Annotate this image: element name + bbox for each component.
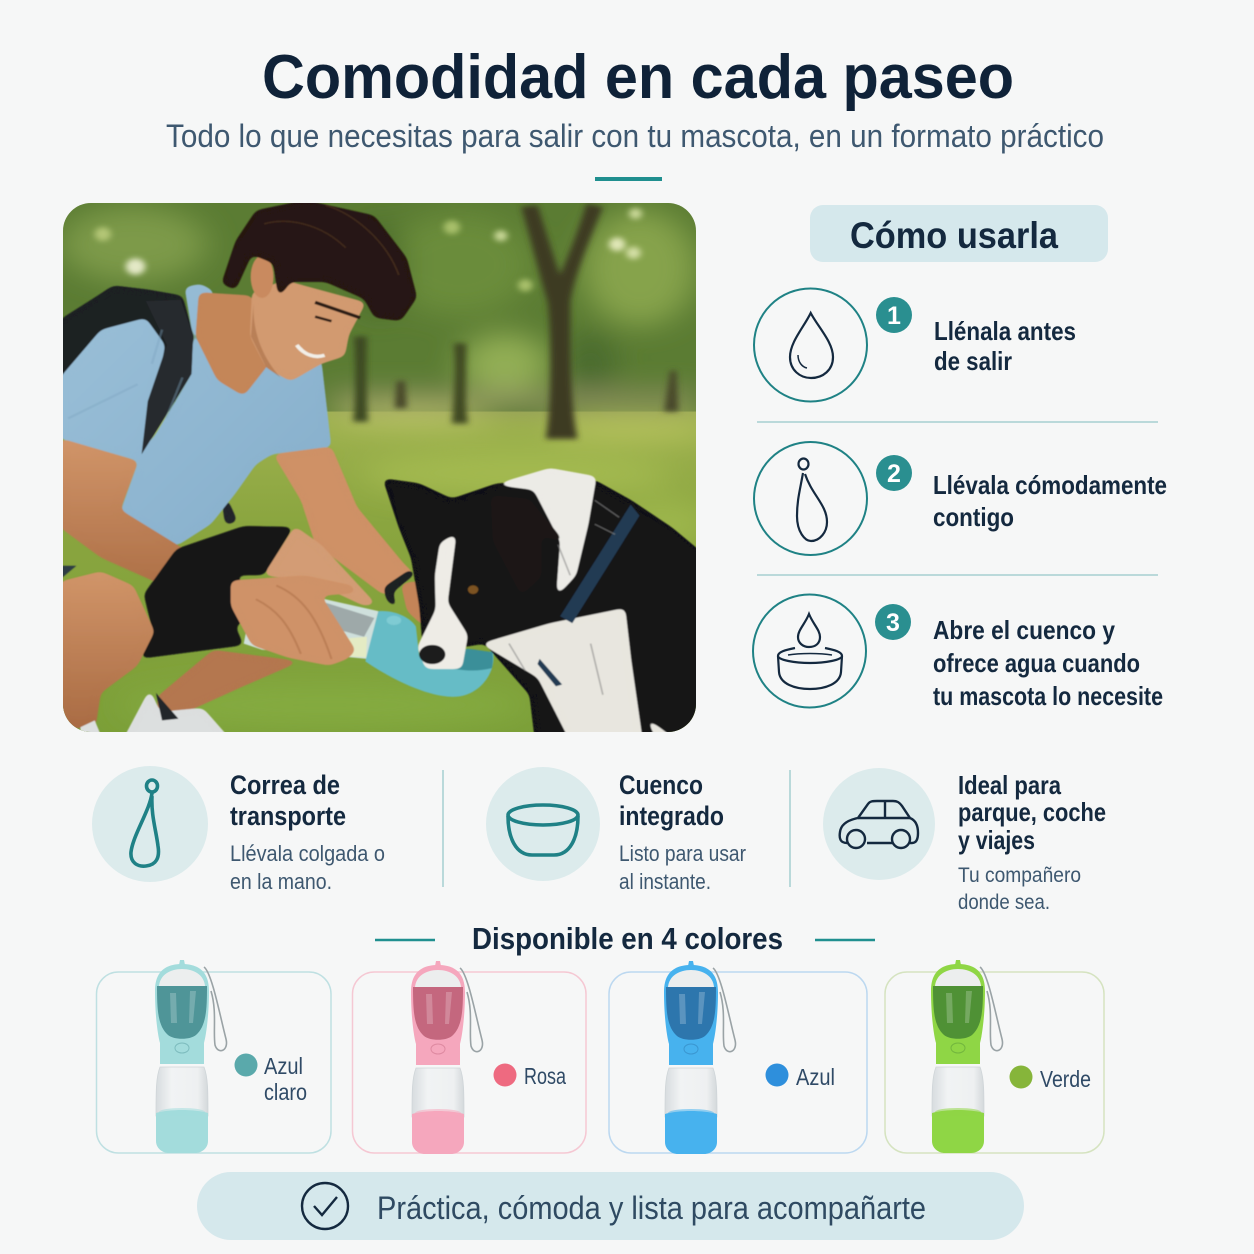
- photo background: [60, 200, 713, 735]
- step 2 text: [933, 470, 1167, 532]
- colour card: green: Verde: [1040, 1066, 1091, 1092]
- dog: [382, 468, 709, 746]
- shorts: [140, 526, 293, 659]
- subtitle: Todo lo que necesitas para salir con tu mascota, en un formato práctico: [166, 118, 1104, 154]
- feature text: en la mano.: [230, 869, 332, 894]
- badge 3: 3: [886, 609, 900, 637]
- face details: [297, 302, 360, 357]
- icon: check: [302, 1183, 348, 1229]
- feature text: y viajes: [958, 825, 1035, 855]
- backpack: [63, 285, 194, 439]
- shirt: [60, 284, 331, 546]
- feature text: Correa de: [230, 770, 340, 800]
- colour card: blue: [609, 961, 867, 1154]
- shoe: [126, 694, 226, 732]
- badge 2: [876, 455, 912, 491]
- feature text: Ideal para: [958, 770, 1061, 800]
- hand: [231, 575, 356, 666]
- badge 2: 2: [887, 460, 901, 488]
- step 1: [754, 288, 1076, 402]
- step 3: [753, 594, 1163, 711]
- feature text: Tu compañero: [958, 864, 1081, 887]
- watch: [384, 570, 414, 605]
- title: Comodidad en cada paseo: [262, 43, 1014, 112]
- feature: bowl: [486, 767, 746, 894]
- heading: colours: Disponible en 4 colores: [472, 921, 783, 956]
- icon: strap: [754, 442, 867, 555]
- feature text: transporte: [230, 801, 346, 831]
- step 3 text: tu mascota lo necesite: [933, 681, 1163, 711]
- colour card: light blue: claro: [264, 1079, 307, 1105]
- colour card: pink: [352, 961, 586, 1154]
- feature text: [230, 770, 385, 894]
- step 3 text: Abre el cuenco y: [933, 615, 1115, 645]
- colour card: light blue: [96, 960, 331, 1153]
- head: [250, 280, 366, 382]
- skin: neck, arms, legs: [196, 292, 269, 396]
- icon: water drop: [754, 288, 867, 402]
- photo: man giving water to dog in park: [60, 200, 713, 746]
- step 2 text: contigo: [933, 502, 1014, 532]
- badge 1: [876, 297, 912, 333]
- step 2: [754, 442, 1167, 555]
- feature text: parque, coche: [958, 797, 1106, 827]
- feature text: [958, 770, 1106, 914]
- step 1 text: Llénala antes: [934, 316, 1076, 346]
- colour card: green: [885, 960, 1104, 1153]
- bottle green: [931, 960, 1003, 1153]
- bottom banner: [197, 1172, 1024, 1240]
- badge 3: [875, 604, 911, 640]
- product bottle: [244, 596, 493, 697]
- step 3 text: ofrece agua cuando: [933, 648, 1140, 678]
- bottom banner: Práctica, cómoda y lista para acompañarte: [377, 1190, 926, 1226]
- feature: car: [823, 768, 1106, 914]
- feature text: integrado: [619, 801, 724, 831]
- colour card: pink: Rosa: [524, 1063, 566, 1089]
- feature: strap: [92, 766, 385, 894]
- colour card: blue: Azul: [796, 1064, 835, 1090]
- feature text: Cuenco: [619, 770, 703, 800]
- feature text: Listo para usar: [619, 841, 746, 866]
- heading: Cómo usarla: [810, 205, 1108, 262]
- icon: car: [840, 801, 918, 848]
- icon: strap: [131, 780, 158, 866]
- step 3 text: [933, 615, 1163, 711]
- step 1 text: de salir: [934, 346, 1012, 376]
- bottle pink: [411, 961, 483, 1154]
- feature text: [619, 770, 746, 894]
- badge 1: 1: [887, 302, 901, 330]
- icon: bowl: [508, 805, 578, 855]
- feature text: donde sea.: [958, 891, 1050, 914]
- step 1 text: [934, 316, 1076, 376]
- feature text: al instante.: [619, 869, 711, 894]
- heading: Cómo usarla: Cómo usarla: [850, 215, 1058, 256]
- feature text: Llévala colgada o: [230, 841, 385, 866]
- icon: bowl with drop: [753, 594, 866, 708]
- colour card: light blue: Azul: [264, 1053, 303, 1079]
- hair: [221, 200, 417, 321]
- bottle blue: [664, 961, 736, 1154]
- bottle light blue: [155, 960, 227, 1153]
- step 2 text: Llévala cómodamente: [933, 470, 1167, 500]
